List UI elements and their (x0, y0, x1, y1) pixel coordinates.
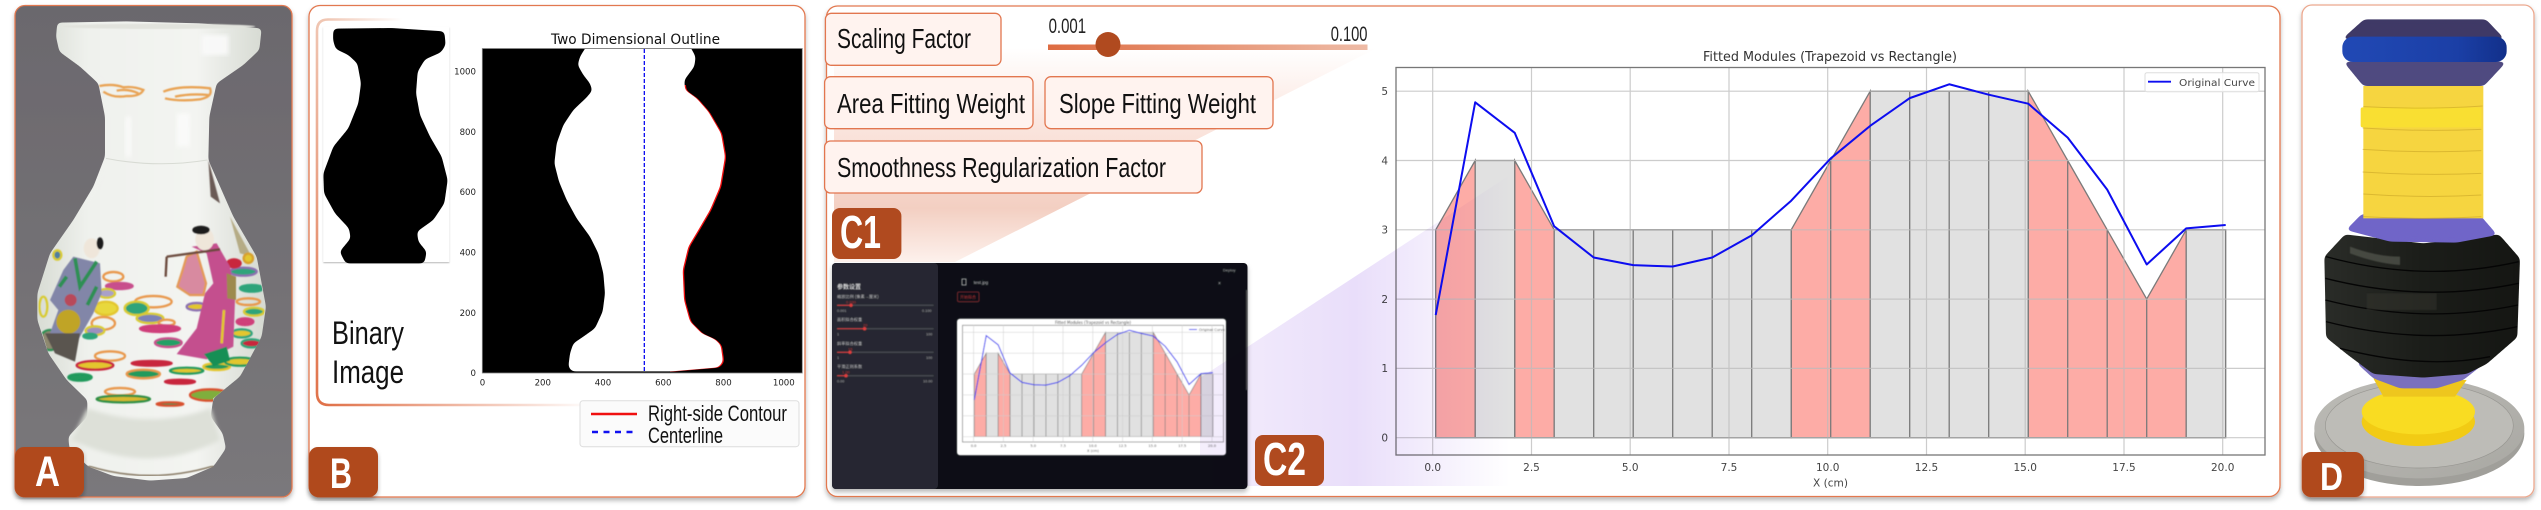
miniature fitted chart: 10.0 (1089, 444, 1098, 448)
label chip A (15, 447, 84, 497)
miniature fitted chart: X (cm) (1087, 449, 1100, 453)
top dark purple cones (2342, 19, 2505, 39)
sidebar settings: 100 (926, 332, 932, 336)
sidebar settings: 0.100 (922, 309, 932, 313)
flute lady (177, 243, 235, 359)
outline legend (580, 401, 799, 448)
sidebar settings: 参数设置 (837, 283, 861, 291)
sidebar settings: 100 (926, 356, 932, 360)
parameter: slope fitting weight (1045, 77, 1273, 129)
plot title: Two Dimensional Outline (550, 32, 720, 48)
parameter: area fitting weight: Area Fitting Weight (837, 88, 1025, 119)
miniature fitted chart: 15.0 (1148, 444, 1157, 448)
scaling factor slider: 0.100 (1331, 23, 1368, 46)
x axis title: X (cm) (1813, 478, 1848, 490)
sidebar settings: 1 (837, 332, 839, 336)
left figure (50, 257, 102, 350)
label chip B (309, 447, 378, 498)
scaling factor slider: 0.001 (1049, 15, 1086, 38)
plot tick labels: 0 (480, 379, 485, 389)
binary image caption: Image (332, 354, 404, 390)
x axis labels: 12.5 (1915, 462, 1938, 474)
x axis labels: 17.5 (2112, 462, 2136, 474)
yellow modules (2361, 86, 2483, 218)
plot tick labels (454, 68, 795, 389)
plot tick labels: 400 (460, 248, 476, 258)
x axis labels: 2.5 (1523, 462, 1540, 474)
interface screenshot C2 (832, 263, 1248, 489)
parameter: scaling factor: Scaling Factor (837, 23, 971, 54)
miniature fitted chart: Fitted Modules (Trapezoid vs Rectangle) (1055, 320, 1131, 325)
outline plot (454, 32, 802, 389)
miniature fitted chart: 5.0 (1030, 444, 1037, 448)
panel A: vase photograph (15, 6, 292, 497)
label chip B: B (330, 450, 352, 498)
panel D: assembled physical model (2302, 5, 2534, 499)
label chip D: D (2320, 456, 2343, 499)
miniature fitted chart: Original Curve (1199, 328, 1226, 332)
zoom wedge from interface to chart (1200, 175, 1510, 486)
plot tick labels: 200 (535, 379, 551, 389)
miniature fitted chart: 0.0 (971, 444, 977, 448)
lower purple ring (2355, 362, 2487, 388)
parameter: smoothness regularization factor (825, 141, 1202, 193)
x axis labels: 10.0 (1816, 462, 1839, 474)
plot tick labels: 800 (715, 379, 732, 389)
plot tick labels: 400 (595, 379, 611, 389)
chart title: Fitted Modules (Trapezoid vs Rectangle) (1703, 50, 1957, 65)
gray tray (2314, 378, 2524, 486)
sidebar settings (837, 283, 934, 384)
blue ring (2342, 37, 2507, 62)
plot tick labels: 1000 (773, 379, 795, 389)
main area header: × (1218, 281, 1221, 287)
sidebar settings: 0.001 (837, 309, 847, 313)
main area header (958, 268, 1247, 390)
main area header: Deploy (1223, 268, 1235, 272)
miniature fitted chart: 17.5 (1178, 444, 1186, 448)
rectangle modules (1475, 91, 2226, 438)
sidebar settings: 面积拟合权重 (837, 316, 862, 323)
x axis labels: 20.0 (2211, 462, 2234, 474)
y axis labels: 0 (1381, 432, 1388, 444)
miniature fitted chart: 7.5 (1060, 444, 1066, 448)
binary image caption: Binary (332, 315, 404, 351)
miniature fitted chart (957, 319, 1226, 455)
plot tick labels: 1000 (454, 68, 476, 78)
label chip C1: C1 (840, 206, 881, 258)
parameter: smoothness regularization factor: Smoothness Regularization Factor (837, 152, 1166, 183)
plot tick labels: 600 (655, 379, 672, 389)
x axis labels (1424, 462, 2234, 474)
original curve (1436, 84, 2226, 315)
parameter: area fitting weight (825, 77, 1033, 129)
sidebar settings: 10.00 (923, 380, 933, 384)
plot tick labels: 800 (460, 128, 476, 138)
y axis labels: 1 (1381, 363, 1388, 375)
sidebar settings: 1 (837, 356, 839, 360)
binary image card (323, 27, 449, 263)
parameter: scaling factor (825, 13, 1001, 65)
sidebar settings: 15 (848, 346, 853, 352)
vase photo (37, 21, 266, 481)
upper purple ring (2346, 214, 2497, 243)
scaling factor slider (1048, 15, 1368, 57)
y axis labels (1381, 86, 1388, 444)
plot tick labels: 0 (471, 369, 476, 379)
chart legend: Original Curve (2179, 78, 2255, 89)
printed tower photo (2314, 19, 2524, 486)
y axis labels: 3 (1381, 225, 1388, 237)
label chip D (2302, 452, 2364, 499)
sidebar settings: 缩放比例 (像素→厘米) (837, 293, 879, 300)
trapezoid modules (1436, 91, 2186, 438)
x axis labels: 15.0 (2014, 462, 2037, 474)
plot tick labels: 600 (460, 188, 476, 198)
y axis labels: 4 (1381, 155, 1388, 167)
y axis labels: 2 (1381, 294, 1388, 306)
binary image caption (332, 315, 404, 390)
sidebar settings: 0.00 (837, 380, 844, 384)
sidebar settings: 平滑正则系数 (837, 363, 863, 370)
sidebar settings: 0.030 (846, 300, 857, 304)
black modules (2324, 234, 2520, 378)
label chip C2: C2 (1263, 433, 1306, 485)
vase silhouette (554, 43, 726, 373)
panel C: parameters, interface and fitted chart (825, 6, 2280, 496)
x axis labels: 5.0 (1622, 462, 1639, 474)
parameter: slope fitting weight: Slope Fitting Weight (1059, 88, 1256, 119)
label chip A: A (35, 448, 60, 496)
outline legend: Right-side Contour (648, 401, 787, 426)
fitted modules chart (1381, 50, 2265, 490)
plot tick labels: 200 (460, 309, 476, 319)
y axis labels: 5 (1381, 86, 1388, 98)
chart legend (2145, 73, 2259, 92)
sidebar settings: 20 (863, 322, 868, 328)
miniature fitted chart: 20.0 (1208, 444, 1217, 448)
x axis labels: 7.5 (1721, 462, 1737, 474)
yellow foot (2362, 378, 2475, 446)
sidebar settings: 斜率拟合权重 (837, 340, 862, 347)
sidebar settings: 1.00 (842, 370, 851, 374)
main area header: 开始拟合 (960, 294, 976, 300)
outline legend: Centerline (648, 423, 723, 448)
panel B: binary image and outline (309, 6, 805, 498)
main area header: test.jpg (974, 280, 989, 285)
miniature fitted chart: 12.5 (1119, 444, 1127, 448)
miniature fitted chart: 2.5 (1001, 444, 1006, 448)
x axis labels: 0.0 (1424, 462, 1441, 474)
